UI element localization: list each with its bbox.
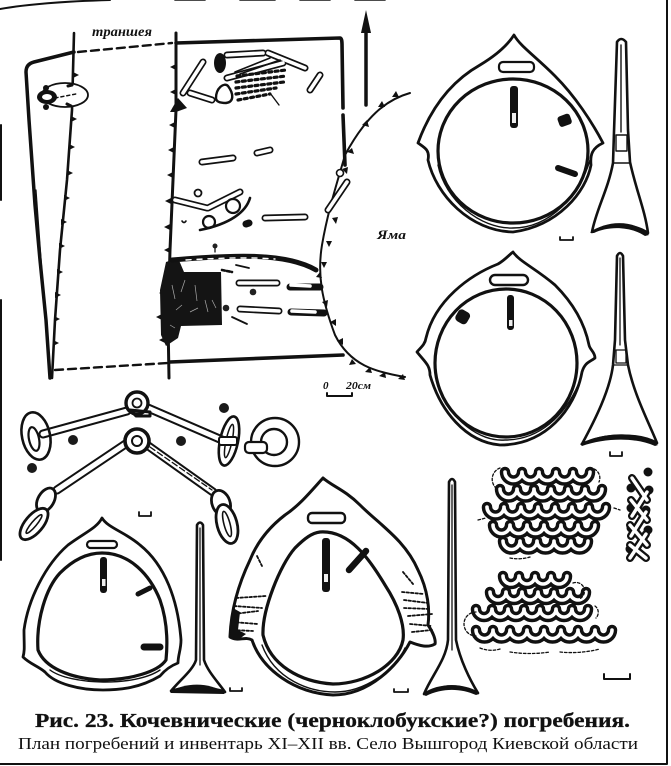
left skeleton remains — [37, 83, 88, 110]
pit outline — [320, 93, 410, 377]
chain mail side view — [626, 468, 654, 558]
horse bit lower — [15, 429, 242, 546]
stirrup 3 — [23, 518, 181, 690]
stirrup 4 side view — [424, 479, 479, 696]
caption title: Рис. 23. Кочевнические (черноклобукские?) погребения. — [35, 710, 630, 732]
stirrup 1 — [418, 35, 603, 232]
left trench wall — [52, 33, 74, 378]
scale — [560, 237, 573, 240]
label: pit: Яма — [376, 227, 407, 242]
stirrup 4 — [230, 478, 435, 695]
stirrup 3 side view — [170, 522, 225, 694]
right trench wall — [168, 33, 176, 378]
lower remains — [172, 244, 324, 324]
scale — [139, 512, 151, 516]
chain mail upper — [478, 468, 620, 559]
plan scale — [323, 380, 371, 396]
label: trench: траншея — [92, 25, 152, 40]
dark burial mass — [160, 258, 222, 346]
stirrup 2 side view — [580, 253, 658, 446]
grave walls — [176, 38, 345, 165]
dashed trench edges — [55, 43, 172, 370]
caption subtitle: План погребений и инвентарь XI–XII вв. Село Вышгород Киевской области — [18, 734, 638, 753]
stirrup 1 side view — [590, 39, 649, 236]
bit dots — [27, 403, 229, 473]
stirrup 2 — [417, 252, 595, 445]
scale — [230, 688, 242, 691]
horse bit upper — [17, 392, 243, 467]
chain mail lower — [464, 576, 612, 654]
middle bones — [175, 150, 347, 230]
scale — [604, 674, 630, 679]
north arrow — [361, 10, 371, 105]
left grave outline — [26, 52, 74, 378]
plan scale: 0 — [323, 380, 329, 392]
scale — [394, 689, 408, 692]
site plan — [26, 10, 410, 396]
cheek ring — [245, 418, 299, 466]
scale — [610, 452, 622, 456]
upper skeleton — [170, 53, 320, 112]
plan scale: 20см — [345, 380, 371, 392]
